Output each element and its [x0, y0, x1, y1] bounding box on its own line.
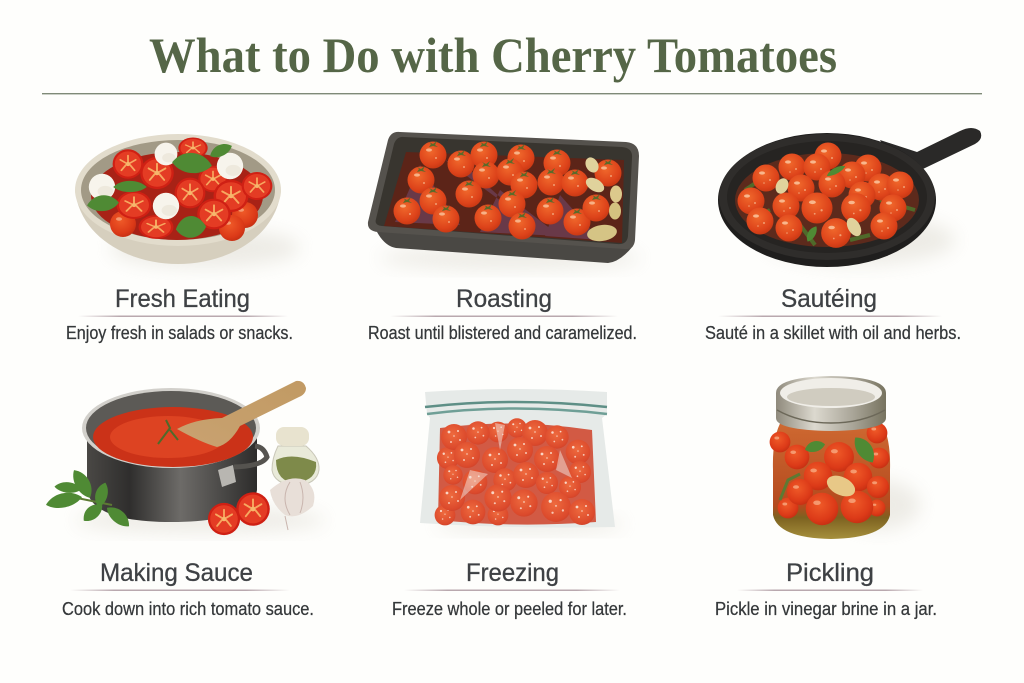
caption: Enjoy fresh in salads or snacks. [66, 323, 293, 343]
divider [718, 316, 942, 317]
illustration: freezer bag of tomatoes [420, 389, 625, 533]
heading: Freezing [466, 559, 559, 587]
illustration: bowl of caprese salad [75, 134, 300, 268]
tomato halves [208, 503, 240, 535]
panel: roasting [368, 132, 640, 343]
heading: Fresh Eating [115, 285, 250, 313]
caption: Pickle in vinegar brine in a jar. [715, 599, 937, 619]
caption: Sauté in a skillet with oil and herbs. [705, 323, 961, 343]
panel: sauteing [705, 128, 981, 343]
illustration: cast iron skillet [718, 128, 981, 267]
heading: Sautéing [781, 285, 877, 313]
garlic [270, 478, 314, 516]
illustration: roasting tray [368, 132, 640, 270]
divider [70, 590, 290, 591]
jar [272, 446, 319, 486]
heading: Roasting [456, 285, 552, 313]
caption: Freeze whole or peeled for later. [392, 599, 627, 619]
heading: Pickling [786, 559, 874, 587]
caption: Roast until blistered and caramelized. [368, 323, 637, 343]
pot handle [234, 446, 267, 467]
panel: fresh eating [66, 134, 300, 343]
panel: making sauce [44, 381, 325, 619]
wooden spoon [177, 381, 306, 447]
title rule [42, 93, 982, 94]
panel: freezing [392, 389, 627, 619]
panel: pickling [715, 376, 937, 619]
caption: Cook down into rich tomato sauce. [62, 599, 314, 619]
divider [737, 590, 923, 591]
illustration: jar of pickled tomatoes [770, 376, 920, 539]
divider [390, 316, 618, 317]
title: What to Do with Cherry Tomatoes [149, 27, 837, 83]
basil sprig [44, 466, 134, 531]
heading: Making Sauce [100, 559, 253, 587]
divider [404, 590, 620, 591]
illustration: sauce pot with garlic, herbs and tomatoes [44, 381, 325, 535]
divider [78, 316, 288, 317]
